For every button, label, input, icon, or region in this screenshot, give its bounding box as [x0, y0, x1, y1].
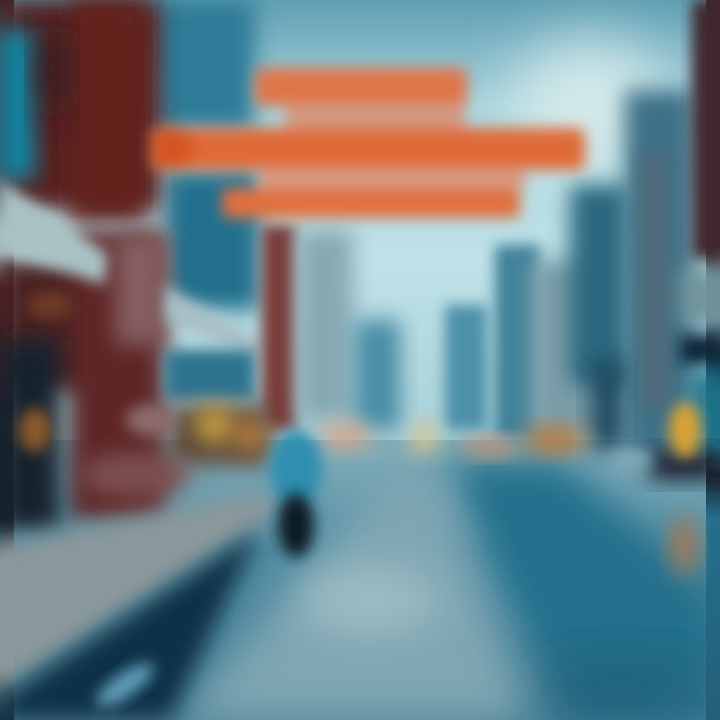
- banner main row: [150, 128, 585, 170]
- left pavement: [0, 490, 270, 720]
- banner top row: [255, 68, 467, 106]
- title banner: orange blurred lettering: [150, 68, 585, 218]
- banner third row: [260, 168, 525, 188]
- banner second row: [285, 104, 465, 128]
- right buildings: [445, 0, 720, 480]
- left buildings: [0, 0, 400, 530]
- right edge base tones: [706, 0, 720, 720]
- road: [0, 440, 720, 720]
- banner bottom row: [222, 188, 520, 218]
- background: sky: [0, 0, 720, 470]
- left edge base tones: [0, 0, 14, 720]
- street lights and reflections: [19, 291, 701, 575]
- sky highlight: [510, 40, 670, 180]
- figure: person walking: [270, 430, 322, 557]
